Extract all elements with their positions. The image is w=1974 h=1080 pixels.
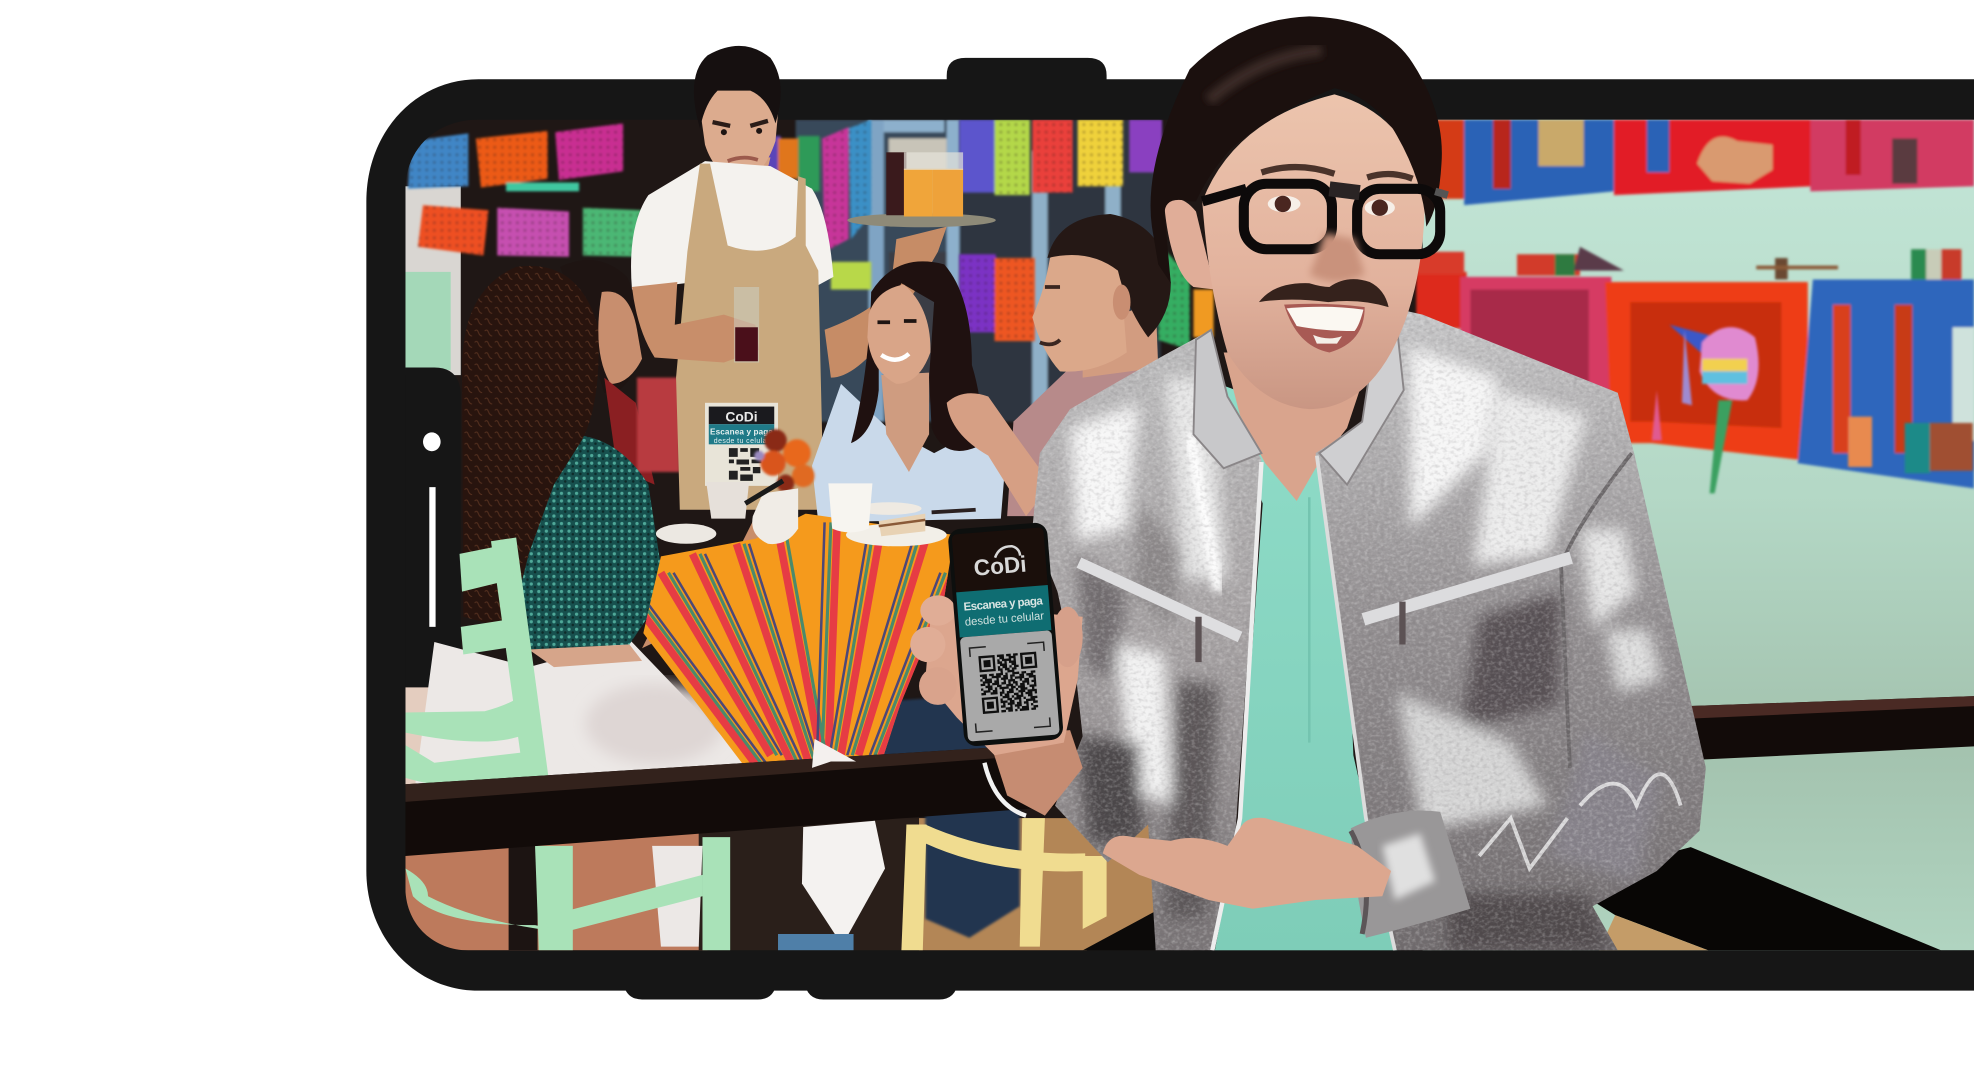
table items dark: [932, 510, 976, 512]
flags top centre: [959, 120, 1162, 195]
waiter brows and eyes: [713, 121, 768, 126]
eyes: [877, 321, 916, 322]
waiter: [631, 152, 996, 510]
presenter left sleeve: [984, 730, 1083, 816]
side notch with camera: [405, 368, 461, 687]
head: [1151, 16, 1448, 409]
green chair: [405, 537, 730, 950]
centre woman: [812, 261, 1005, 522]
hand holding phone: [910, 595, 1083, 755]
black rail right: [1687, 696, 1974, 760]
hair: [1151, 16, 1442, 283]
floor centre wood: [919, 818, 1165, 950]
table items: [656, 481, 976, 546]
table cloth: [636, 503, 963, 774]
mint wall: [1423, 120, 1974, 950]
glasses: [1202, 184, 1448, 254]
left black rail: [405, 743, 1070, 856]
right collar: [1319, 308, 1404, 485]
lower trouser: [652, 846, 702, 947]
silver jacket right panel: [1309, 302, 1712, 957]
pale floor behind chair: [406, 687, 428, 784]
wall crates second row: [1416, 247, 1974, 488]
QR table sign: [705, 403, 778, 486]
waist: [529, 644, 642, 667]
yellow chair: [901, 818, 1107, 950]
neck and chest: [881, 373, 929, 472]
drink glasses: [886, 152, 963, 217]
logo: CoDi: [973, 551, 1027, 581]
eyebrows: [1261, 167, 1413, 179]
blouse: [812, 384, 1005, 522]
waiter mouth: [728, 158, 758, 161]
papel picado flags: [408, 120, 1214, 350]
sign QR: [729, 448, 762, 481]
teal band: [956, 585, 1051, 638]
man behind curly woman: [598, 292, 655, 484]
zippers: [1079, 456, 1571, 950]
hand: [947, 393, 1051, 516]
left pocket zip: [1079, 563, 1240, 637]
flags behind waiter: [763, 120, 871, 252]
arm: [642, 516, 768, 648]
pitcher: [752, 488, 798, 544]
cuff edge: [984, 763, 1026, 816]
waiter t-shirt: [631, 161, 834, 290]
dark restaurant interior: [406, 120, 1422, 824]
head: [1032, 251, 1127, 372]
phone case: [947, 522, 1064, 747]
face: [867, 284, 930, 384]
fingers: [920, 595, 956, 626]
QR brackets: [969, 642, 1050, 732]
smile: [881, 354, 909, 360]
blouse: [519, 434, 665, 650]
hair: [1047, 214, 1171, 337]
waiter neck: [720, 157, 770, 198]
QR finders: [980, 653, 1039, 713]
chair slats: [460, 544, 514, 592]
tray: [847, 213, 996, 227]
chair lower legs: [535, 846, 573, 950]
QR table sign: desde tu celular: [714, 438, 770, 445]
sign caption: Escanea y paga: [710, 427, 773, 436]
flag row second left: [418, 183, 642, 257]
napkin: [802, 821, 885, 945]
caption light: desde tu celular: [964, 610, 1045, 629]
speaker line: [429, 487, 436, 627]
teal polo shirt: [1215, 384, 1397, 950]
shirt placket: [1308, 497, 1310, 743]
table leg: [508, 846, 538, 950]
palm: [925, 604, 1083, 755]
hair: [851, 261, 981, 451]
right man: [947, 214, 1171, 516]
nose: [1309, 233, 1365, 282]
sign logo: CoDi: [725, 409, 758, 425]
thumb: [1052, 607, 1083, 667]
jeans under table: [884, 698, 1022, 940]
blue window frames: [796, 120, 1161, 422]
left jacket glints: [1190, 434, 1219, 592]
eyes: [1268, 196, 1300, 212]
presenter pointing hand: [1103, 811, 1470, 938]
cuff edge: [1351, 831, 1367, 934]
illustration: smartphone with CoDi restaurant scene: [366, 16, 1974, 1000]
face: [1202, 94, 1425, 409]
cuff highlight: [1382, 833, 1435, 900]
wall crates top row: [1435, 120, 1974, 205]
wrist: [988, 730, 1083, 816]
waiter far arm and hand: [825, 227, 947, 378]
QR modules: [978, 653, 1038, 713]
white trousers: [415, 639, 749, 790]
trouser shade: [585, 683, 724, 764]
neck: [1224, 352, 1372, 501]
chair back post: [491, 537, 549, 787]
flags lower centre: [831, 245, 1214, 350]
blue chair foot: [778, 934, 854, 950]
white left wall: [405, 186, 461, 375]
grey panel: [960, 630, 1060, 742]
waiter head above frame: [694, 46, 781, 198]
shelf cups: [1848, 417, 1973, 473]
main presenter: [984, 16, 1712, 957]
cuff: [1351, 811, 1470, 938]
flowers: [754, 429, 815, 492]
logo arc: [994, 545, 1020, 558]
waiter near arm: [632, 282, 759, 363]
camera dot: [423, 432, 441, 451]
notch: [405, 368, 461, 687]
silver jacket left panel: [1026, 321, 1272, 957]
black floor wedge right: [1561, 847, 1941, 950]
shirt: [1007, 359, 1171, 516]
table skirt napkin: [812, 739, 856, 768]
neck: [1083, 302, 1158, 378]
centre zip right: [1317, 456, 1395, 950]
mouth: [1284, 304, 1365, 352]
waiter hair: [694, 46, 781, 128]
phone frame: [366, 58, 1974, 999]
QR code: [978, 653, 1039, 713]
diners and table: [405, 152, 1171, 950]
hair sheen: [1209, 50, 1322, 101]
floor under table: [699, 818, 919, 950]
curly-haired woman: [415, 266, 768, 947]
screen top: [952, 527, 1048, 595]
moustache: [1259, 279, 1389, 307]
left collar: [1193, 330, 1261, 468]
right sleeve folds: [1479, 774, 1681, 869]
left jacket grain: [1026, 321, 1272, 957]
phone in diner hand: [745, 481, 783, 503]
plates: [656, 524, 716, 544]
apron: [676, 164, 822, 510]
mint shelf: [405, 272, 451, 370]
red glass: [734, 287, 759, 363]
top side button: [947, 58, 1107, 88]
caption bold: Escanea y paga: [963, 595, 1044, 614]
zip pulls: [1198, 602, 1402, 662]
screen scene background: [405, 120, 1974, 950]
cups: [706, 482, 749, 519]
teeth: [1287, 307, 1363, 331]
centre zip left: [1212, 462, 1261, 950]
black wedge centre: [1083, 912, 1156, 950]
right jacket grain: [1309, 302, 1712, 957]
ear: [1165, 199, 1215, 290]
bottom side button right: [804, 982, 958, 999]
hand: [1103, 818, 1391, 909]
cake: [879, 514, 925, 536]
phone body: [366, 79, 1974, 991]
right pocket zip: [1363, 558, 1571, 619]
wood floor right: [1599, 915, 1708, 950]
flag row top left: [408, 123, 623, 189]
bottom side button left: [623, 982, 777, 999]
ear: [1113, 284, 1131, 320]
waiter face: [700, 86, 778, 179]
floor left: [405, 831, 708, 950]
eye and smile: [1040, 287, 1060, 344]
hair: [462, 266, 599, 629]
window and wall bits behind diners: [637, 378, 680, 472]
pinata: [1652, 325, 1759, 493]
right sleeve seam: [1561, 453, 1632, 768]
handheld phone showing QR: [947, 522, 1064, 747]
